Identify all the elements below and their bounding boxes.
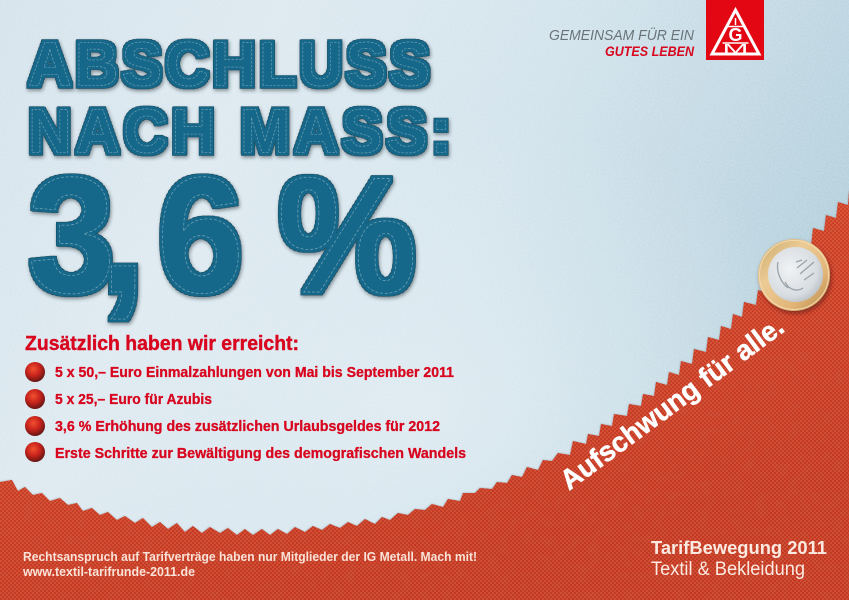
bullet 2: 5 x 25,– Euro für Azubis: [55, 391, 212, 408]
heading: Zusätzlich haben wir erreicht: Zusätzlich haben wir erreicht:: [25, 333, 299, 355]
bullet 2: [25, 389, 212, 409]
list: additional results: [25, 362, 466, 462]
title: Abschluss nach Maß: [28, 30, 451, 166]
campaign label: TarifBewegung 2011: Textil & Bekleidung: [651, 559, 805, 580]
slogan: Gemeinsam für ein gutes Leben: GUTES LEBEN: [605, 44, 694, 59]
footer note: membership call and website: www.textil-tarifrunde-2011.de: [22, 565, 195, 579]
icon: IG Metall logo: I: [734, 17, 737, 28]
slogan: Gemeinsam für ein gutes Leben: GEMEINSAM FÜR EIN: [549, 26, 695, 44]
icon: IG Metall logo: M: [722, 41, 748, 56]
campaign label: TarifBewegung 2011: TarifBewegung 2011: [651, 538, 827, 558]
coin: one euro: [758, 239, 830, 311]
headline figure: 3,6 %: [28, 134, 417, 330]
footer note: membership call and website: [22, 550, 477, 579]
footer note: membership call and website: Rechtsanspruch auf Tarifverträge haben nur Mitglieder der IG Metall. Mach mit!: [23, 550, 477, 564]
campaign label: TarifBewegung 2011: [651, 538, 827, 580]
bullet 4: Erste Schritte zur Bewältigung des demografischen Wandels: [55, 445, 466, 462]
panel: red fabric with pinked edge: [0, 190, 849, 600]
headline figure: 3,6 %: %: [277, 143, 417, 328]
title: Abschluss nach Maß: NACH MASS:: [28, 97, 451, 166]
slogan: Gemeinsam für ein gutes Leben: [549, 26, 695, 59]
icon: IG Metall logo: G: [728, 25, 743, 45]
slogan on fabric: Aufschwung für alle: Aufschwung für alle.: [554, 310, 790, 496]
bullet 3: 3,6 % Erhöhung des zusätzlichen Urlaubsgeldes für 2012: [55, 418, 440, 435]
headline figure: 3,6 %: 6: [157, 143, 244, 328]
headline figure: 3,6 %: 3: [28, 143, 115, 328]
headline figure: 3,6 %: ,: [100, 134, 146, 330]
title: Abschluss nach Maß: ABSCHLUSS: [28, 30, 430, 99]
icon: IG Metall logo: [706, 0, 764, 60]
bullet 1: 5 x 50,– Euro Einmalzahlungen von Mai bis September 2011: [55, 364, 454, 381]
